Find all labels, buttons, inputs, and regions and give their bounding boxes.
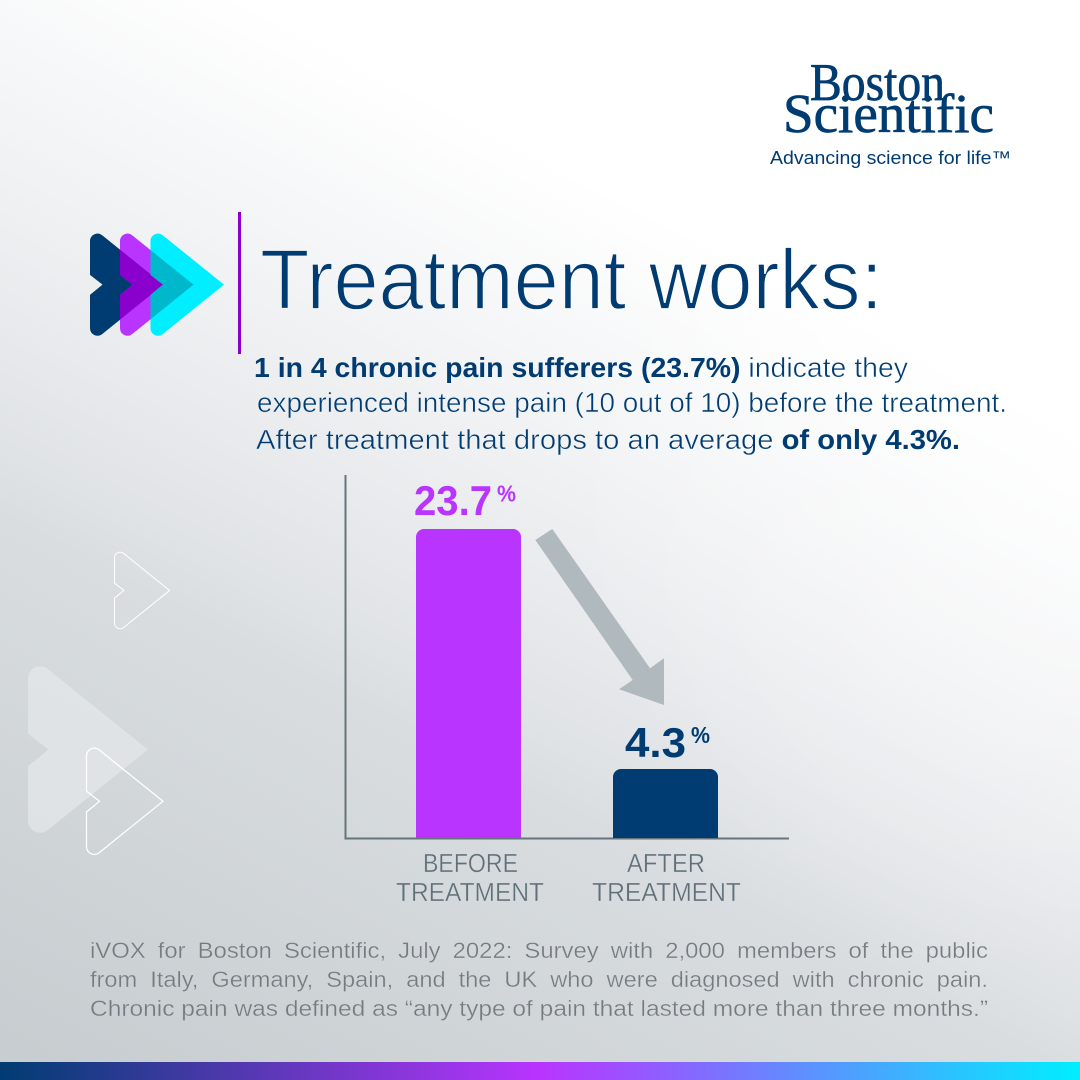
footnote: Chronic pain was defined as “any type of pain that lasted more than three months.” (90, 996, 988, 1021)
logo: Boston Scientific: Scientific (783, 83, 994, 144)
value: 4.3%: % (691, 722, 710, 748)
logo: Boston Scientific (770, 54, 1011, 168)
bar chart (346, 475, 789, 907)
value: 23.7%: % (497, 480, 516, 506)
label: before treatment: BEFORE (423, 848, 518, 878)
logo: Boston Scientific: Boston (810, 54, 945, 112)
footnote: from Italy, Germany, Spain, and the UK who were diagnosed with chronic pain. (90, 967, 988, 992)
label: before treatment (396, 848, 544, 907)
arrow: decrease (535, 529, 664, 705)
intro text: experienced intense pain (10 out of 10) before the treatment. (257, 387, 1007, 418)
icon: triple chevron (90, 234, 224, 336)
heading divider (238, 212, 241, 354)
value: 23.7%: 23.7 (414, 477, 492, 524)
value: 4.3%: 4.3 (625, 719, 686, 766)
label: after treatment: TREATMENT (592, 877, 741, 907)
value: 4.3% (625, 719, 710, 766)
label: before treatment: TREATMENT (396, 877, 544, 907)
intro text (254, 352, 1007, 455)
footnote (90, 938, 988, 1021)
logo: Boston Scientific: Advancing science for life™ (770, 147, 1011, 168)
label: after treatment (592, 848, 741, 907)
gradient footer bar (0, 1062, 1080, 1080)
decorative chevrons (28, 552, 170, 854)
bar: before treatment (416, 529, 521, 838)
bar: after treatment (613, 769, 718, 838)
footnote: iVOX for Boston Scientific, July 2022: Survey with 2,000 members of the public (90, 938, 988, 963)
title: Treatment works: (260, 233, 883, 328)
intro text: After treatment that drops to an average of only 4.3%. (256, 424, 960, 455)
chart axes (346, 475, 789, 838)
label: after treatment: AFTER (627, 848, 705, 878)
intro text: 1 in 4 chronic pain sufferers (23.7%) indicate they (254, 352, 908, 383)
